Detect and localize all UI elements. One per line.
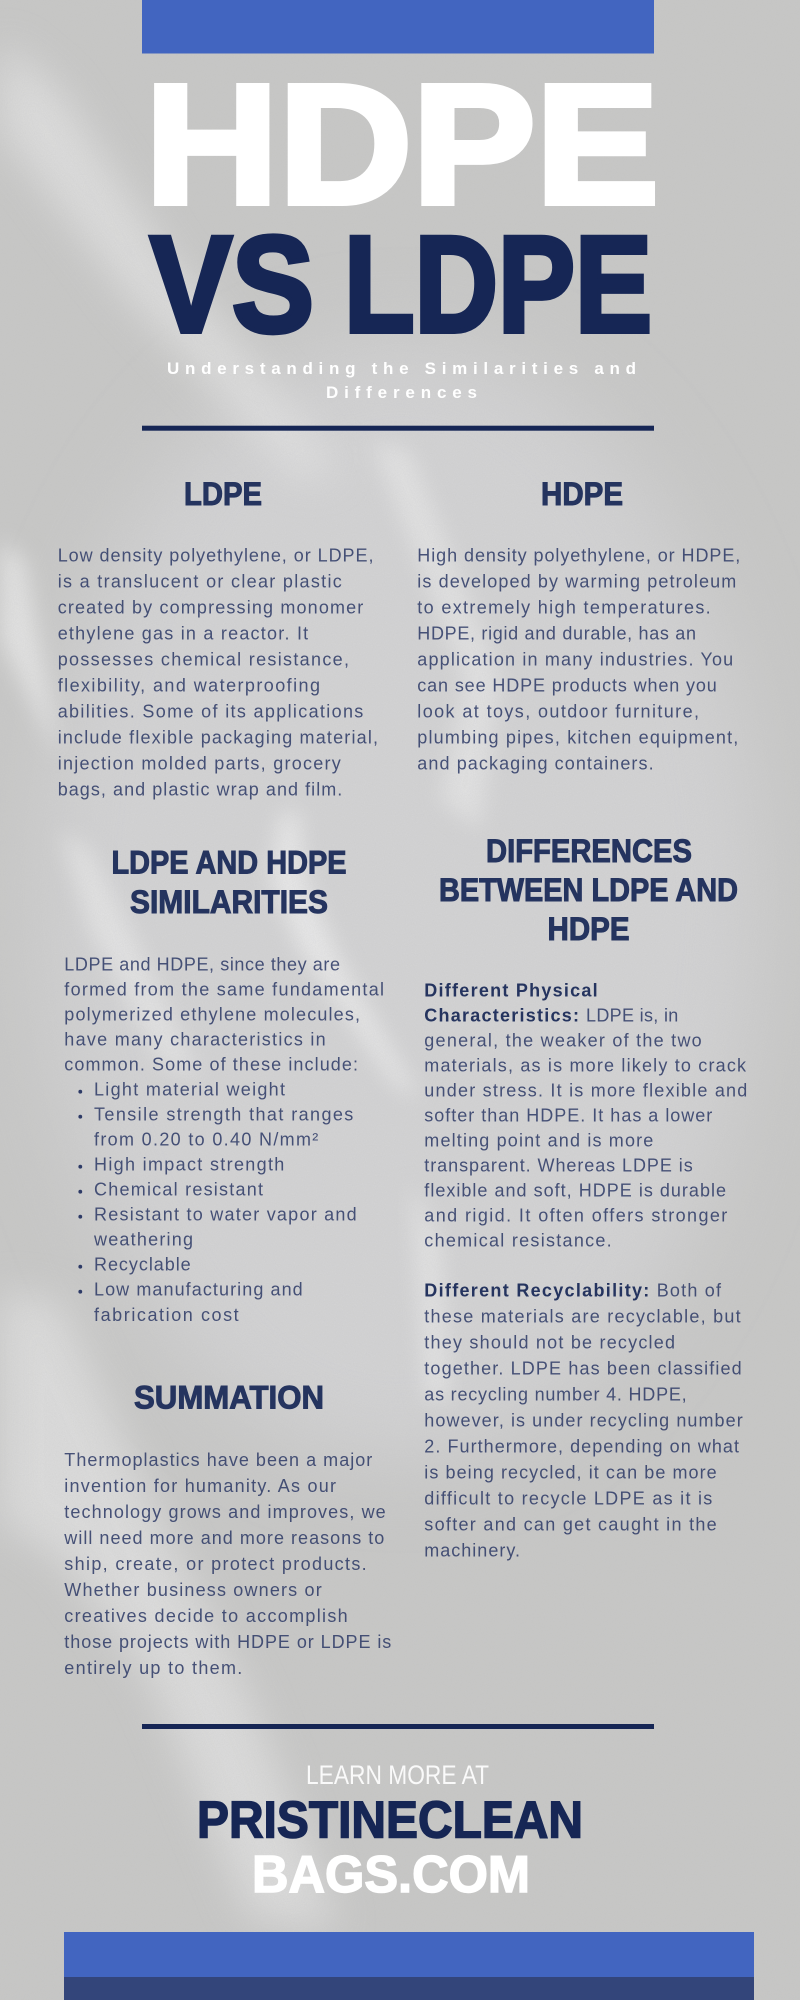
bullet list: shared characteristics: Recyclable (94, 1255, 191, 1275)
heading: HDPE: HDPE (541, 476, 623, 512)
text: different physical characteristics: LDPE is, in (586, 1006, 678, 1026)
text: HDPE description: is developed by warming petroleum (417, 572, 736, 592)
text: similarities intro: common. Some of these include: (64, 1055, 358, 1075)
panel: summation (63, 1380, 391, 1678)
text: different recyclability: Different Recyclability: (424, 1281, 649, 1301)
panel: HDPE (417, 476, 740, 774)
text: LDPE description (58, 546, 378, 800)
text: different recyclability: these materials are recyclable, but (424, 1307, 741, 1327)
subtitle: Differences (326, 383, 477, 402)
bullet list: shared characteristics: Resistant to water vapor and (94, 1205, 357, 1225)
text: different recyclability: 2. Furthermore, depending on what (424, 1437, 739, 1457)
text: HDPE description: HDPE, rigid and durable, has an (417, 624, 696, 644)
text: different physical characteristics: melting point and is more (424, 1131, 653, 1151)
text: summation body: those projects with HDPE or LDPE is (64, 1632, 391, 1652)
bullet list: shared characteristics: from 0.20 to 0.40 N/mm² (94, 1130, 318, 1150)
text: HDPE description: can see HDPE products when you (417, 676, 717, 696)
text: LDPE description: flexibility, and waterproofing (58, 676, 320, 696)
text: different physical characteristics: transparent. Whereas LDPE is (424, 1156, 693, 1176)
bottom divider (142, 1724, 654, 1729)
text: different recyclability: however, is under recycling number (424, 1411, 743, 1431)
text: different physical characteristics: materials, as is more likely to crack (424, 1056, 747, 1076)
text: different recyclability: they should not be recycled (424, 1333, 675, 1353)
bullet list: shared characteristics: fabrication cost (94, 1305, 239, 1325)
top blue bar (142, 0, 654, 54)
text: summation body: creatives decide to accomplish (64, 1606, 348, 1626)
subtitle: Understanding the Similarities and (167, 359, 636, 378)
text: different recyclability: is being recycled, it can be more (424, 1463, 717, 1483)
heading: summation: SUMMATION (134, 1380, 324, 1416)
text: HDPE description: look at toys, outdoor furniture, (417, 702, 699, 722)
text: similarities intro: have many characteristics in (64, 1030, 326, 1050)
text: LDPE description: created by compressing monomer (58, 598, 363, 618)
bullet list: shared characteristics: Tensile strength that ranges (94, 1105, 353, 1125)
heading: LDPE: LDPE (184, 476, 262, 512)
bottom blue bar (64, 1932, 754, 2000)
website line two: BAGS.COM (252, 1846, 530, 1904)
text: HDPE description: to extremely high temperatures. (417, 598, 711, 618)
website line one: PRISTINECLEAN (197, 1792, 583, 1850)
text: summation body: technology grows and improves, we (64, 1502, 386, 1522)
learn more label: LEARN MORE AT (306, 1760, 489, 1790)
text: different recyclability: as recycling number 4. HDPE, (424, 1385, 687, 1405)
text: similarities intro: formed from the same fundamental (64, 980, 384, 1000)
text: summation body: entirely up to them. (64, 1658, 242, 1678)
text: different recyclability: difficult to recycle LDPE as it is (424, 1489, 712, 1509)
text: HDPE description: and packaging containers. (417, 754, 654, 774)
text: different recyclability: Both of (657, 1281, 722, 1301)
top divider (142, 426, 654, 431)
bullet list: shared characteristics: weathering (93, 1230, 193, 1250)
call to action (197, 1760, 583, 1904)
text: HDPE description: High density polyethylene, or HDPE, (417, 546, 740, 566)
heading: differences between LDPE and HDPE: BETWEEN LDPE AND (439, 872, 738, 908)
text: different physical characteristics: softer than HDPE. It has a lower (424, 1106, 712, 1126)
text: LDPE description: is a translucent or clear plastic (58, 572, 342, 592)
text: similarities intro (64, 955, 384, 1075)
text: different physical characteristics (424, 981, 747, 1251)
heading: differences between LDPE and HDPE: HDPE (548, 911, 630, 947)
text: different physical characteristics: Characteristics: (424, 1006, 579, 1026)
text: LDPE description: include flexible packaging material, (58, 728, 378, 748)
panel: LDPE (58, 476, 378, 800)
bullet list: shared characteristics: Light material weight (94, 1080, 285, 1100)
title line: HDPE: HDPE (145, 50, 659, 240)
text: HDPE description (417, 546, 740, 774)
title line: VS LDPE (150, 208, 652, 362)
text: HDPE description: plumbing pipes, kitchen equipment, (417, 728, 738, 748)
text: HDPE description: application in many industries. You (417, 650, 733, 670)
text: LDPE description: injection molded parts, grocery (58, 754, 341, 774)
title line: VS LDPE: LDPE (344, 208, 652, 362)
title (145, 50, 659, 362)
title line: VS LDPE: VS (150, 208, 314, 362)
text: different recyclability: machinery. (424, 1541, 520, 1561)
text: different recyclability: together. LDPE has been classified (424, 1359, 742, 1379)
text: LDPE description: possesses chemical resistance, (58, 650, 349, 670)
text: different physical characteristics: and rigid. It often offers stronger (424, 1206, 727, 1226)
text: summation body: ship, create, or protect products. (64, 1554, 367, 1574)
text: different physical characteristics: chemical resistance. (424, 1231, 612, 1251)
text: summation body: invention for humanity. As our (64, 1476, 336, 1496)
heading: LDPE and HDPE similarities: SIMILARITIES (130, 884, 328, 920)
heading: LDPE and HDPE similarities (112, 844, 346, 920)
text: LDPE description: bags, and plastic wrap and film. (58, 780, 342, 800)
bullet list: shared characteristics: High impact strength (94, 1155, 284, 1175)
text: summation body: Thermoplastics have been a major (64, 1450, 372, 1470)
panel: differences (424, 833, 747, 1561)
text: different physical characteristics: Different Physical (424, 981, 598, 1001)
bullet list: shared characteristics: Chemical resistant (94, 1180, 263, 1200)
text: different physical characteristics: general, the weaker of the two (424, 1031, 702, 1051)
heading: LDPE and HDPE similarities: LDPE AND HDPE (112, 844, 346, 880)
heading: differences between LDPE and HDPE: DIFFERENCES (486, 833, 692, 869)
text: summation body: will need more and more reasons to (63, 1528, 384, 1548)
panel: similarities (64, 844, 384, 1325)
text: summation body: Whether business owners or (64, 1580, 322, 1600)
text: different physical characteristics: flexible and soft, HDPE is durable (424, 1181, 726, 1201)
subtitle (167, 359, 636, 402)
text: different recyclability (424, 1281, 743, 1561)
text: LDPE description: abilities. Some of its applications (58, 702, 363, 722)
text: similarities intro: polymerized ethylene molecules, (64, 1005, 360, 1025)
text: LDPE description: Low density polyethylene, or LDPE, (58, 546, 373, 566)
text: different physical characteristics: under stress. It is more flexible and (424, 1081, 747, 1101)
bullet list: shared characteristics: Low manufacturing and (94, 1280, 303, 1300)
text: different recyclability: softer and can get caught in the (424, 1515, 717, 1535)
text: LDPE description: ethylene gas in a reactor. It (58, 624, 308, 644)
text: summation body (63, 1450, 391, 1678)
heading: differences between LDPE and HDPE (439, 833, 738, 947)
bullet list: shared characteristics (78, 1080, 357, 1325)
text: similarities intro: LDPE and HDPE, since they are (64, 955, 340, 975)
